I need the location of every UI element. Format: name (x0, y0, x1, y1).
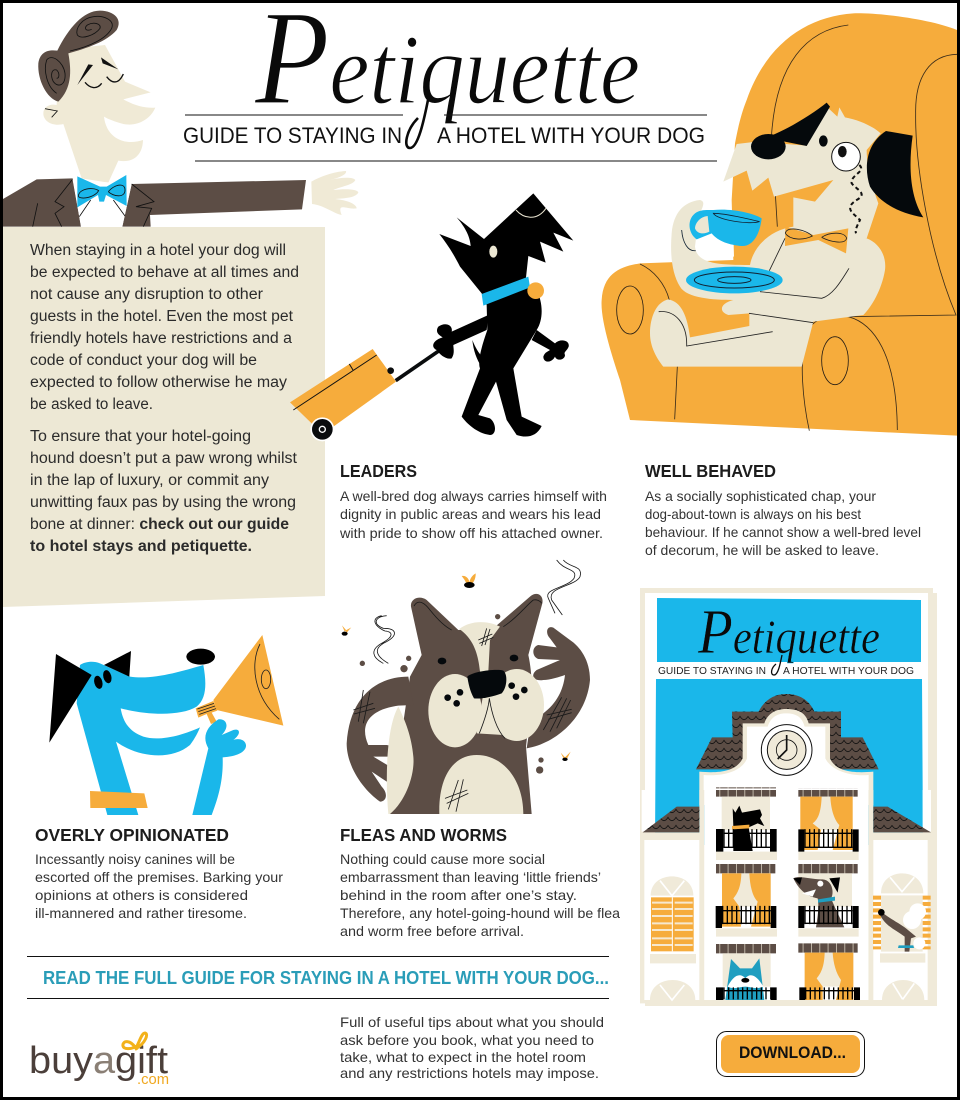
window curtains (722, 797, 853, 1000)
armchair outlines (640, 25, 957, 431)
text: leaders: LEADERS (340, 461, 417, 481)
text: leaders: dignity in public areas and wears his lead (340, 507, 601, 522)
text: download description (340, 1015, 604, 1081)
wing roofs (643, 807, 931, 832)
illustration: dog in armchair (602, 13, 957, 436)
text: intro first paragraph: guests in the hotel. Even the most pet (30, 308, 294, 325)
button: download: DOWNLOAD... (739, 1044, 846, 1062)
hotel lower building (640, 788, 932, 1003)
right wing window with poodle (877, 873, 927, 1000)
dog eyes and whisker spots (438, 655, 528, 707)
illustration: scottie dog with suitcase (290, 193, 573, 441)
logo: buyagift: buyagift (29, 1040, 168, 1082)
illustration: butler pointing (3, 11, 358, 227)
illustration: scratching dog with fleas (342, 560, 590, 814)
flies and flea specks (342, 573, 571, 774)
megaphone (196, 635, 283, 726)
dog body lines (659, 238, 849, 346)
butler suit (3, 178, 306, 227)
text: intro second paragraph: to hotel stays and petiquette. (30, 538, 252, 555)
upper window tops (722, 796, 770, 805)
text: overly opinionated: ill-mannered and rather tiresome. (35, 906, 247, 921)
balcony railings (716, 829, 860, 1000)
text: intro second paragraph: hound doesn’t put a paw wrong whilst (30, 450, 298, 467)
text: well behaved: behaviour. If he cannot show a well-bred level (645, 525, 921, 540)
book title: Petiquette (697, 596, 880, 667)
text: download description: Full of useful tips about what you should (340, 1015, 604, 1030)
butler hair (38, 11, 119, 102)
window: scottie (716, 790, 859, 987)
hotel upper building (696, 694, 879, 805)
suitcase handle (396, 347, 445, 381)
text: fleas and worms: FLEAS AND WORMS (340, 825, 507, 845)
text: intro first paragraph: be asked to leave. (30, 396, 153, 413)
text: well behaved (645, 461, 921, 558)
text: intro first paragraph: not cause any disruption to other (30, 286, 263, 303)
upper window lintels (716, 787, 858, 797)
butler shirt (73, 180, 132, 227)
teacup (690, 210, 762, 246)
dog belly patches (387, 622, 523, 814)
hotel base (640, 790, 932, 1003)
window: grey dog (793, 877, 844, 927)
hotel facade (699, 709, 873, 805)
butler eyebrows (77, 57, 118, 85)
armchair (602, 13, 957, 436)
butler bow tie (77, 175, 127, 207)
text: download description: and any restrictions hotels may impose. (340, 1066, 599, 1081)
text: well behaved: of decorum, he will be asked to leave. (645, 543, 879, 558)
text: download description: take, what to expect in the hotel room (340, 1050, 586, 1065)
text: fleas and worms: embarrassment than leaving ‘little friends’ (340, 870, 601, 885)
call to action heading: READ THE FULL GUIDE FOR STAYING IN A HOTEL WITH YOUR DOG... (43, 967, 609, 988)
text: intro second paragraph: bone at dinner: check out our guide (30, 516, 289, 533)
suitcase (290, 349, 396, 427)
dog muzzle (477, 693, 503, 735)
text: leaders: with pride to show off his attached owner. (339, 526, 603, 541)
book page frame (640, 588, 937, 1006)
text: fleas and worms: Therefore, any hotel-going-hound will be flea (340, 906, 620, 921)
text: intro first paragraph: friendly hotels have restrictions and a (30, 330, 292, 347)
text: intro first paragraph (30, 242, 299, 413)
dog nose (467, 670, 506, 699)
text: intro first paragraph: When staying in a hotel your dog will (30, 242, 286, 259)
dog bow tie (785, 227, 848, 253)
text: overly opinionated: opinions at others is considered (35, 888, 248, 903)
illustration: guide book cover (640, 588, 937, 1006)
dog ear (867, 131, 923, 217)
butler hand (311, 171, 358, 215)
panel: intro cream box (3, 227, 325, 607)
text: overly opinionated (35, 825, 283, 921)
text: fleas and worms: and worm free before arrival. (340, 924, 524, 939)
dog black patch and nose (770, 103, 830, 146)
blue dog eyes (93, 675, 104, 690)
book subtitle (658, 666, 914, 677)
blue dog ears (49, 651, 131, 743)
subtitle: A HOTEL WITH YOUR DOG (437, 123, 705, 148)
text: intro second paragraph (30, 428, 298, 555)
saucer (686, 267, 783, 293)
illustration: blue dog with megaphone (49, 635, 283, 815)
dog right arm (527, 627, 590, 748)
text: fleas and worms: behind in the room after one’s stay. (340, 888, 577, 903)
text: well behaved: WELL BEHAVED (645, 461, 776, 481)
monocle (832, 142, 860, 171)
hotel roof (696, 694, 879, 769)
window: husky (725, 958, 764, 1000)
butler face (43, 45, 155, 183)
text: overly opinionated: escorted off the premises. Barking your (35, 870, 283, 885)
suitcase wheel (310, 417, 334, 441)
hair curls and facial lines (45, 16, 123, 117)
scottie silhouette (439, 193, 573, 437)
button: download (716, 1032, 864, 1076)
scottie arms and tail (433, 315, 569, 367)
blue dog collar (90, 791, 148, 808)
text: intro second paragraph: in the lap of luxury, or commit any (30, 472, 269, 489)
book subtitle: GUIDE TO STAYING IN (658, 666, 766, 677)
text: well behaved: As a socially sophisticated chap, your (645, 489, 876, 504)
book sky blue panels (655, 598, 923, 845)
text: leaders: A well-bred dog always carries himself with (340, 489, 607, 504)
dog left arm (347, 677, 413, 802)
dog fur and stink lines (353, 560, 581, 812)
hotel clock (761, 725, 812, 775)
text: fleas and worms (340, 825, 620, 939)
text: well behaved: dog-about-town is always on his best (645, 507, 861, 522)
text: leaders (339, 461, 607, 541)
white gap behind cup (695, 233, 734, 257)
text: intro first paragraph: code of conduct your dog will be (30, 352, 257, 369)
book subtitle: A HOTEL WITH YOUR DOG (783, 666, 914, 677)
subtitle (183, 115, 717, 161)
scratching dog head and body (390, 594, 543, 814)
text: intro first paragraph: be expected to behave at all times and (30, 264, 299, 281)
text: download description: ask before you book, what you need to (340, 1033, 594, 1048)
left wing window (650, 876, 696, 1000)
text: intro first paragraph: expected to follow otherwise he may (30, 374, 287, 391)
dog head (723, 107, 881, 240)
logo: buyagift: .com (137, 1072, 169, 1088)
blue dog body (77, 662, 205, 815)
text: fleas and worms: Nothing could cause more social (340, 852, 545, 867)
scottie collar (482, 277, 530, 306)
blue dog arm (192, 719, 246, 815)
text: overly opinionated: OVERLY OPINIONATED (35, 825, 229, 845)
text: intro second paragraph: To ensure that your hotel-going (30, 428, 251, 445)
subtitle: GUIDE TO STAYING IN (183, 123, 402, 148)
text: intro second paragraph: unwitting faux pas by using the wrong (30, 494, 296, 511)
blue dog nose (186, 649, 215, 665)
text: overly opinionated: Incessantly noisy canines will be (35, 852, 235, 867)
dog body (650, 200, 885, 367)
